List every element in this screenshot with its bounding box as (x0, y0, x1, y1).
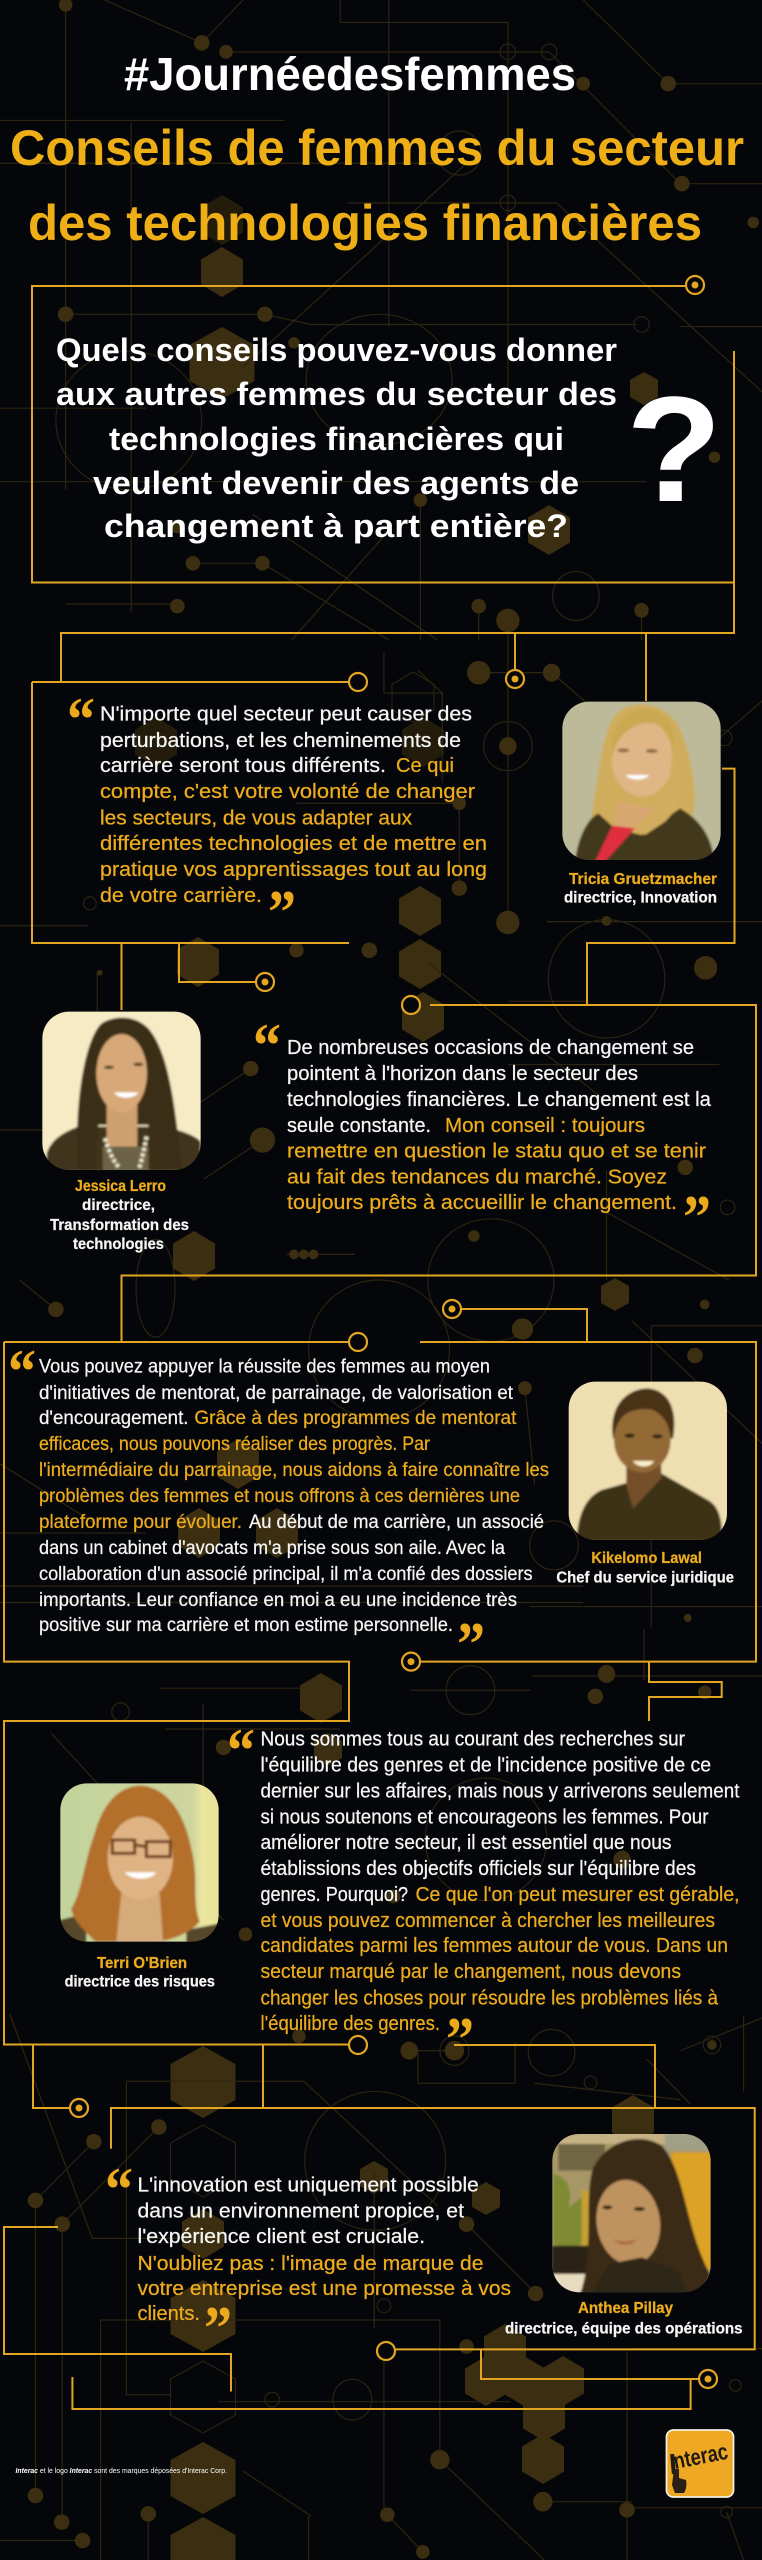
photo: Kikelomo Lawal (568, 1382, 727, 1540)
panel: Terri quote: l'équilibre des genres. (260, 2013, 440, 2035)
panel: Kikelomo quote: ” (457, 1611, 485, 1679)
panel: Jessica quote: seule constante. (287, 1115, 431, 1137)
photo: Jessica Lerro (42, 1012, 201, 1170)
question block: technologies financières qui (109, 421, 564, 457)
panel: Jessica quote: technologies financières. Le changement est la (287, 1089, 712, 1111)
panel: Anthea quote: “ (105, 2156, 133, 2224)
question block: aux autres femmes du secteur des (56, 376, 617, 412)
panel: Terri quote: Nous sommes tous au courant des recherches sur (260, 1728, 685, 1750)
caption: Jessica Lerro (50, 1178, 189, 1253)
panel: Tricia quote: Ce qui (396, 755, 454, 777)
caption: Jessica Lerro: directrice, (82, 1197, 155, 1214)
panel: Jessica quote: toujours prêts à accueillir le changement. (287, 1192, 677, 1214)
photo: Anthea Pillay (552, 2134, 711, 2292)
caption: Tricia Gruetzmacher (564, 871, 717, 906)
panel: Anthea quote: N'oubliez pas : l'image de marque de (138, 2253, 484, 2275)
title: main heading: Conseils de femmes du secteur (10, 120, 744, 176)
panel: Kikelomo quote: l'intermédiaire du parrainage, nous aidons à faire connaître les (39, 1459, 549, 1481)
panel: Kikelomo quote: Au début de ma carrière, un associé (249, 1511, 544, 1533)
panel: Anthea quote: l'expérience client est cruciale. (138, 2226, 425, 2248)
panel: Kikelomo quote: d'encouragement. (39, 1407, 188, 1429)
panel: Tricia quote: de votre carrière. (100, 885, 262, 907)
title: hashtag: #Journéedesfemmes (124, 48, 576, 100)
panel: Jessica quote (253, 1012, 712, 1252)
panel: Anthea quote: dans un environnement propice, et (138, 2201, 464, 2223)
photo: Tricia Gruetzmacher (562, 702, 721, 860)
title: main heading (10, 120, 744, 251)
panel: Terri quote: “ (227, 1717, 255, 1785)
panel: Tricia quote: perturbations, et les cheminements de (100, 730, 461, 752)
panel: Kikelomo quote: importants. Leur confiance en moi a eu une incidence très (39, 1589, 517, 1611)
panel: Tricia quote: “ (67, 686, 95, 754)
panel: Kikelomo quote: efficaces, nous pouvons réaliser des progrès. Par (39, 1433, 430, 1455)
panel: Anthea quote: L'innovation est uniquement possible (138, 2174, 479, 2196)
panel: Tricia quote: compte, c'est votre volonté de changer (100, 781, 475, 803)
panel: Kikelomo quote (8, 1338, 549, 1679)
caption: Anthea Pillay (505, 2300, 743, 2338)
caption: Terri O'Brien (65, 1955, 215, 1990)
panel: Terri quote: Ce que l'on peut mesurer est gérable, (416, 1884, 740, 1906)
panel: Anthea quote (105, 2156, 511, 2363)
title: main heading: des technologies financières (28, 195, 702, 251)
question block: veulent devenir des agents de (93, 465, 579, 501)
panel: Terri quote: et vous pouvez commencer à chercher les meilleures (260, 1910, 715, 1932)
panel: Kikelomo quote: d'initiatives de mentorat, de parrainage, de valorisation et (39, 1382, 514, 1404)
panel: Tricia quote: N'importe quel secteur peut causer des (100, 703, 472, 725)
caption: Tricia Gruetzmacher: Tricia Gruetzmacher (569, 871, 717, 888)
panel: Jessica quote: remettre en question le statu quo et se tenir (287, 1140, 706, 1162)
panel: Kikelomo quote: “ (8, 1338, 36, 1406)
panel: Terri quote: genres. Pourquoi? (260, 1884, 408, 1906)
panel: Terri quote: améliorer notre secteur, il est essentiel que nous (260, 1832, 672, 1854)
caption: Kikelomo Lawal (556, 1550, 734, 1586)
caption: Kikelomo Lawal: Kikelomo Lawal (591, 1550, 702, 1567)
photo: Terri O'Brien (60, 1783, 219, 1942)
panel: Terri quote: ” (446, 2006, 474, 2074)
panel: Anthea quote: ” (204, 2295, 232, 2363)
question block: changement à part entière? (104, 508, 568, 544)
panel: Tricia quote: les secteurs, de vous adapter aux (100, 808, 412, 830)
question block: Quels conseils pouvez-vous donner (56, 332, 617, 368)
panel: Anthea quote: clients. (138, 2303, 200, 2325)
caption: Jessica Lerro: Jessica Lerro (75, 1178, 166, 1195)
icon: Interac logo: nterac (671, 2438, 730, 2474)
caption: Terri O'Brien: directrice des risques (65, 1974, 215, 1990)
question block (56, 332, 617, 544)
panel: Kikelomo quote: problèmes des femmes et nous offrons à ces dernières une (39, 1485, 520, 1507)
caption: Tricia Gruetzmacher: directrice, Innovation (564, 890, 717, 906)
panel: Jessica quote: De nombreuses occasions de changement se (287, 1037, 694, 1059)
panel: Jessica quote: Mon conseil : toujours (445, 1115, 645, 1137)
panel: Terri quote: candidates parmi les femmes autour de vous. Dans un (260, 1935, 728, 1957)
panel: Tricia quote: pratique vos apprentissages tout au long (100, 859, 487, 881)
caption: Terri O'Brien: Terri O'Brien (97, 1955, 187, 1972)
panel: Kikelomo quote: positive sur ma carrière et mon estime personnelle. (39, 1614, 453, 1636)
caption: Anthea Pillay: directrice, équipe des opérations (505, 2320, 743, 2338)
panel: Jessica quote: au fait des tendances du marché. Soyez (287, 1167, 667, 1189)
caption: Kikelomo Lawal: Chef du service juridique (556, 1570, 734, 1586)
panel: Terri quote: si nous soutenons et encourageons les femmes. Pour (260, 1807, 709, 1829)
panel: Terri quote: l'équilibre des genres et de l'incidence positive de ce (260, 1754, 711, 1776)
panel: Kikelomo quote: Grâce à des programmes de mentorat (194, 1407, 517, 1429)
caption: Anthea Pillay: Anthea Pillay (578, 2300, 673, 2317)
panel: Tricia quote: ” (268, 879, 296, 947)
panel: Tricia quote: carrière seront tous différents. (100, 755, 386, 777)
panel: Kikelomo quote: dans un cabinet d'avocats m'a prise sous son aile. Avec la (39, 1537, 505, 1559)
footnote: Interac et le logo Interac sont des marques déposées d'Interac Corp. (16, 2466, 227, 2475)
panel: Terri quote: dernier sur les affaires, mais nous y arriverons seulement (260, 1781, 740, 1803)
panel: Kikelomo quote: Vous pouvez appuyer la réussite des femmes au moyen (39, 1356, 490, 1378)
panel: Kikelomo quote: plateforme pour évoluer. (39, 1511, 242, 1533)
icon: Interac logo (666, 2430, 734, 2497)
icon: question mark: ? (626, 365, 722, 533)
panel: Terri quote (227, 1717, 740, 2074)
panel: Tricia quote: différentes technologies et de mettre en (100, 833, 487, 855)
caption: Jessica Lerro: technologies (73, 1236, 164, 1253)
caption: Jessica Lerro: Transformation des (50, 1217, 189, 1234)
panel: Jessica quote: pointent à l'horizon dans le secteur des (287, 1063, 638, 1085)
panel: Tricia quote (67, 686, 487, 947)
panel: Kikelomo quote: collaboration d'un associé principal, il m'a confié des dossiers (39, 1563, 533, 1585)
panel: Anthea quote: votre entreprise est une promesse à vos (138, 2278, 511, 2300)
panel: Terri quote: établissions des objectifs officiels sur l'équilibre des (260, 1858, 696, 1880)
panel: Jessica quote: “ (253, 1012, 281, 1080)
panel: Jessica quote: ” (683, 1184, 711, 1252)
panel: Terri quote: secteur marqué par le changement, nous devons (260, 1961, 681, 1983)
panel: Terri quote: changer les choses pour résoudre les problèmes liés à (260, 1988, 719, 2010)
